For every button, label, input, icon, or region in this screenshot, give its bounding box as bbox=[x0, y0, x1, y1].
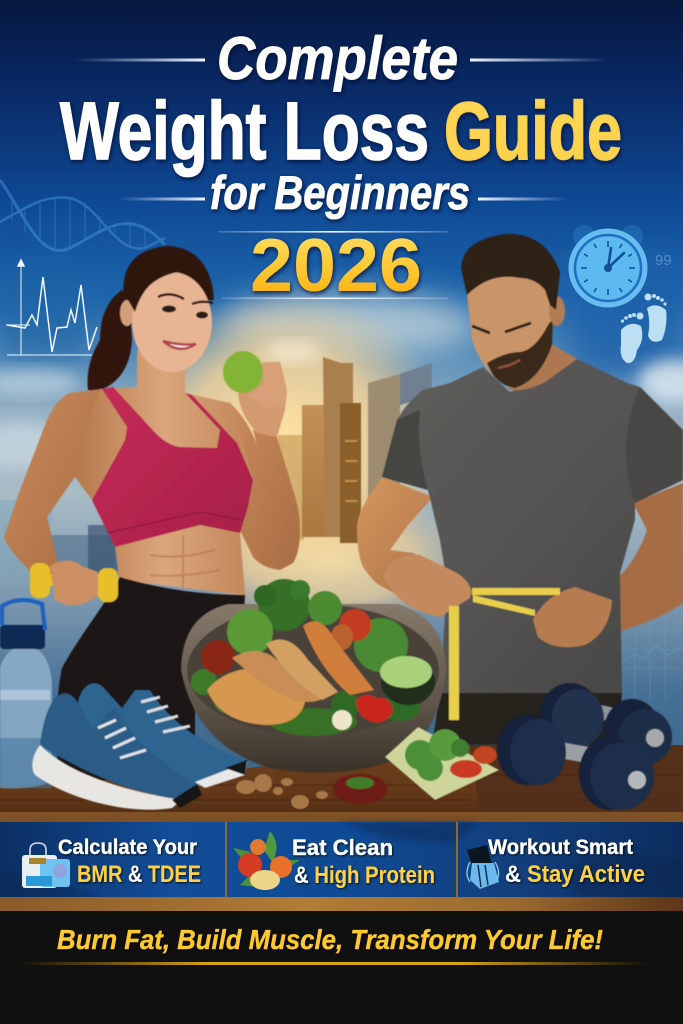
man figure bbox=[357, 234, 683, 745]
panel: black tagline footer bbox=[0, 911, 683, 1024]
title line: for Beginners bbox=[118, 166, 568, 219]
woman: raised arm bbox=[230, 403, 300, 570]
feature 2: eat clean and high protein: & High Protein bbox=[294, 862, 435, 889]
measuring tape bbox=[449, 588, 560, 720]
tomato and nuts on table bbox=[236, 774, 387, 809]
title line: Weight Loss Guide: Weight Loss bbox=[60, 86, 429, 177]
dumbbells bbox=[497, 683, 672, 810]
feature 2: eat clean and high protein: Eat Clean bbox=[292, 835, 393, 860]
man: head bbox=[461, 234, 565, 388]
bowl body bbox=[181, 604, 446, 772]
woman: hand holding apple bbox=[238, 362, 287, 437]
icon: calculator and scale bbox=[22, 843, 70, 888]
wooden table bbox=[0, 745, 683, 822]
crumbled cheese bbox=[332, 710, 352, 730]
grilled chicken slices bbox=[207, 621, 374, 725]
year 2026: 2026 bbox=[250, 223, 422, 307]
water bottle bbox=[0, 600, 52, 788]
wooden strip below banner bbox=[0, 897, 683, 911]
woman: fingers over apple bbox=[247, 362, 287, 408]
title block bbox=[60, 25, 622, 307]
tomatoes bbox=[201, 640, 235, 674]
feature 2: eat clean and high protein bbox=[233, 831, 435, 890]
feature 1: calculate BMR and TDEE: BMR & TDEE bbox=[77, 861, 201, 888]
panel: blue feature banner bbox=[0, 822, 683, 897]
woman: torso and midriff bbox=[75, 350, 253, 595]
apple bbox=[223, 351, 263, 393]
title line: Weight Loss Guide: Guide bbox=[444, 86, 622, 177]
title line: Complete: Complete bbox=[217, 25, 458, 92]
title line: Complete bbox=[75, 25, 610, 92]
greens bbox=[191, 579, 420, 736]
title line: for Beginners: for Beginners bbox=[210, 166, 470, 219]
salad bowl bbox=[181, 579, 446, 772]
food plate with lettuce and tomato bbox=[385, 727, 499, 800]
yellow dumbbell bbox=[30, 563, 118, 602]
man: right hand bbox=[533, 587, 612, 647]
front shoe bbox=[32, 693, 202, 810]
man: right arm bbox=[560, 483, 683, 645]
man: grey t-shirt bbox=[382, 359, 683, 695]
feature 3: workout smart and stay active: Workout Smart bbox=[488, 836, 633, 859]
tagline: Burn Fat, Build Muscle, Transform Your Life! bbox=[57, 924, 603, 955]
feature 1: calculate BMR and TDEE: Calculate Your bbox=[58, 836, 197, 859]
cucumber bbox=[381, 659, 435, 705]
feature 3: workout smart and stay active: & Stay Active bbox=[505, 861, 645, 888]
bowl interior bbox=[187, 604, 439, 736]
back dumbbell bbox=[540, 683, 672, 765]
clock icon bbox=[568, 225, 672, 308]
woman: head bbox=[120, 246, 214, 372]
woman figure bbox=[4, 246, 300, 790]
DNA helix bbox=[0, 180, 165, 251]
icon: resistance band bbox=[467, 845, 499, 889]
man: neck bbox=[490, 342, 577, 390]
man: left arm bbox=[357, 477, 460, 610]
icon: vegetables and nuts bbox=[233, 831, 300, 890]
front dumbbell bbox=[497, 715, 654, 810]
woman: arm with dumbbell bbox=[4, 389, 102, 575]
feature 3: workout smart and stay active bbox=[467, 836, 645, 889]
woman: hand on dumbbell bbox=[50, 560, 98, 605]
rear shoe bbox=[78, 683, 247, 788]
chart grid backdrop right bbox=[620, 600, 683, 700]
woman: ponytail bbox=[88, 290, 132, 391]
clock icon: 99 bbox=[655, 252, 672, 269]
feature 1: calculate BMR and TDEE bbox=[22, 836, 201, 888]
footprints icon bbox=[621, 294, 667, 363]
city skyline bbox=[0, 357, 432, 585]
woman: ab definition bbox=[150, 535, 220, 590]
woman: red sports top bbox=[92, 387, 253, 547]
woman: black shorts bbox=[57, 577, 245, 790]
ECG heart-rate graph bbox=[6, 260, 97, 355]
man: trousers bbox=[432, 693, 622, 745]
red pepper bbox=[356, 694, 393, 723]
man: left hand bbox=[383, 555, 471, 617]
running shoes bbox=[32, 683, 247, 810]
